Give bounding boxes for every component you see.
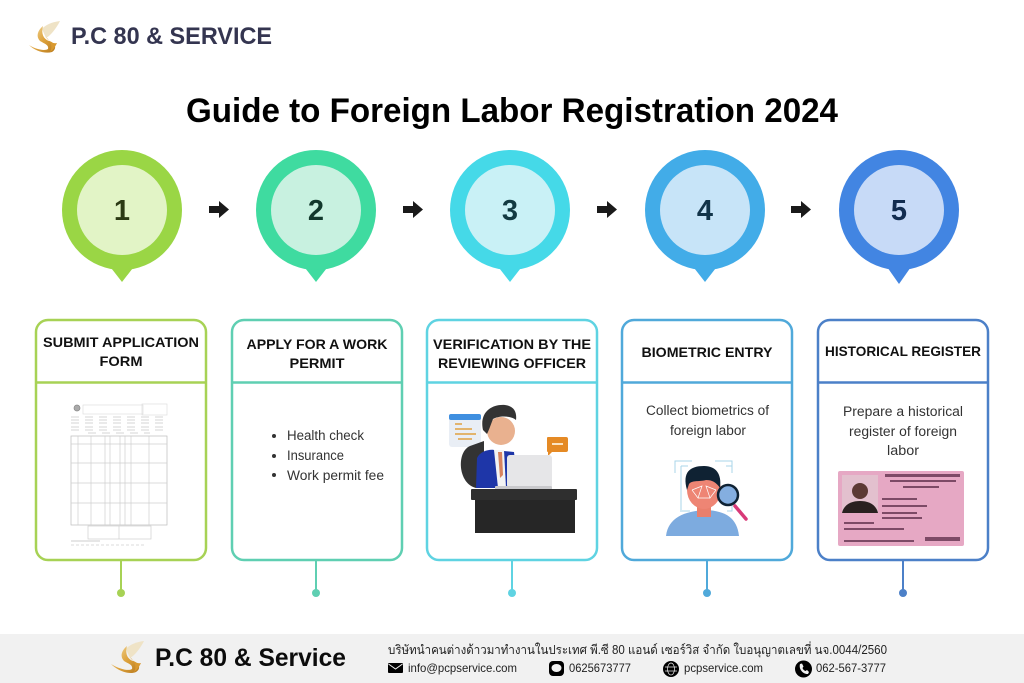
- arrow 3 to 4: [597, 201, 617, 218]
- bullet list: [272, 428, 384, 483]
- bullet list: Health check: [287, 428, 364, 443]
- panel heading: [433, 336, 591, 371]
- panel description: Collect biometrics of: [646, 403, 769, 418]
- panel description: labor: [887, 443, 920, 458]
- icon: golden wing logo: [29, 21, 60, 53]
- panel: submit application form: [36, 320, 206, 597]
- panel heading: HISTORICAL REGISTER: [825, 343, 981, 359]
- step marker 4: 4: [697, 195, 713, 227]
- panel heading: PERMIT: [290, 355, 345, 371]
- panel heading: FORM: [100, 353, 142, 369]
- contact: website: pcpservice.com: [684, 661, 763, 675]
- title: Guide to Foreign Labor Registration 2024: [186, 92, 838, 130]
- contact: line: 0625673777: [569, 661, 631, 675]
- step marker 2: 2: [308, 195, 324, 227]
- step marker 3: [450, 150, 570, 282]
- panel: apply for a work permit: [232, 320, 402, 597]
- step marker 3: 3: [502, 195, 518, 227]
- panel heading: VERIFICATION BY THE: [433, 336, 591, 352]
- brand name: P.C 80 & SERVICE: [71, 23, 272, 50]
- step marker 5: [839, 150, 959, 284]
- step marker 2: [256, 150, 376, 282]
- company licence line: บริษัทนำคนต่างด้าวมาทำงานในประเทศ พี.ซี 80 แอนด์ เซอร์วิส จำกัด ใบอนุญาตเลขที่ นจ.0044/2560: [388, 641, 887, 658]
- panel description: foreign labor: [670, 423, 746, 438]
- bullet list: Work permit fee: [287, 468, 384, 483]
- contact: line: [549, 661, 631, 676]
- arrow 4 to 5: [791, 201, 811, 218]
- contact: email: info@pcpservice.com: [408, 661, 517, 675]
- arrow 2 to 3: [403, 201, 423, 218]
- footer brand name: P.C 80 & Service: [155, 644, 346, 672]
- panel heading: [43, 334, 199, 369]
- panel heading: SUBMIT APPLICATION: [43, 334, 199, 350]
- panel: historical register: [818, 320, 988, 597]
- contact: phone: 062-567-3777: [816, 661, 886, 675]
- step marker 1: 1: [114, 195, 130, 227]
- form document image: [71, 404, 167, 545]
- panel heading: BIOMETRIC ENTRY: [642, 344, 773, 360]
- step marker 1: [62, 150, 182, 282]
- panel: verification by the reviewing officer: [427, 320, 597, 597]
- panel: biometric entry: [622, 320, 792, 597]
- contact: phone: [795, 660, 886, 678]
- illustration: officer at desk: [449, 405, 577, 533]
- step marker 5: 5: [891, 195, 907, 227]
- footer band: [0, 634, 1024, 683]
- step marker 4: [645, 150, 765, 282]
- illustration: face scan with magnifier: [666, 461, 746, 536]
- image: pink ID card: [838, 471, 964, 546]
- contact: website: [663, 661, 763, 677]
- arrow 1 to 2: [209, 201, 229, 218]
- panel description: register of foreign: [849, 424, 957, 439]
- icon: footer golden wing logo: [111, 641, 144, 673]
- panel description: [843, 404, 963, 458]
- panel heading: [246, 336, 388, 371]
- panel heading: REVIEWING OFFICER: [438, 355, 586, 371]
- bullet list: Insurance: [287, 448, 344, 463]
- panel heading: APPLY FOR A WORK: [246, 336, 388, 352]
- panel description: [646, 403, 769, 438]
- header logo: [29, 21, 272, 53]
- panel description: Prepare a historical: [843, 404, 963, 419]
